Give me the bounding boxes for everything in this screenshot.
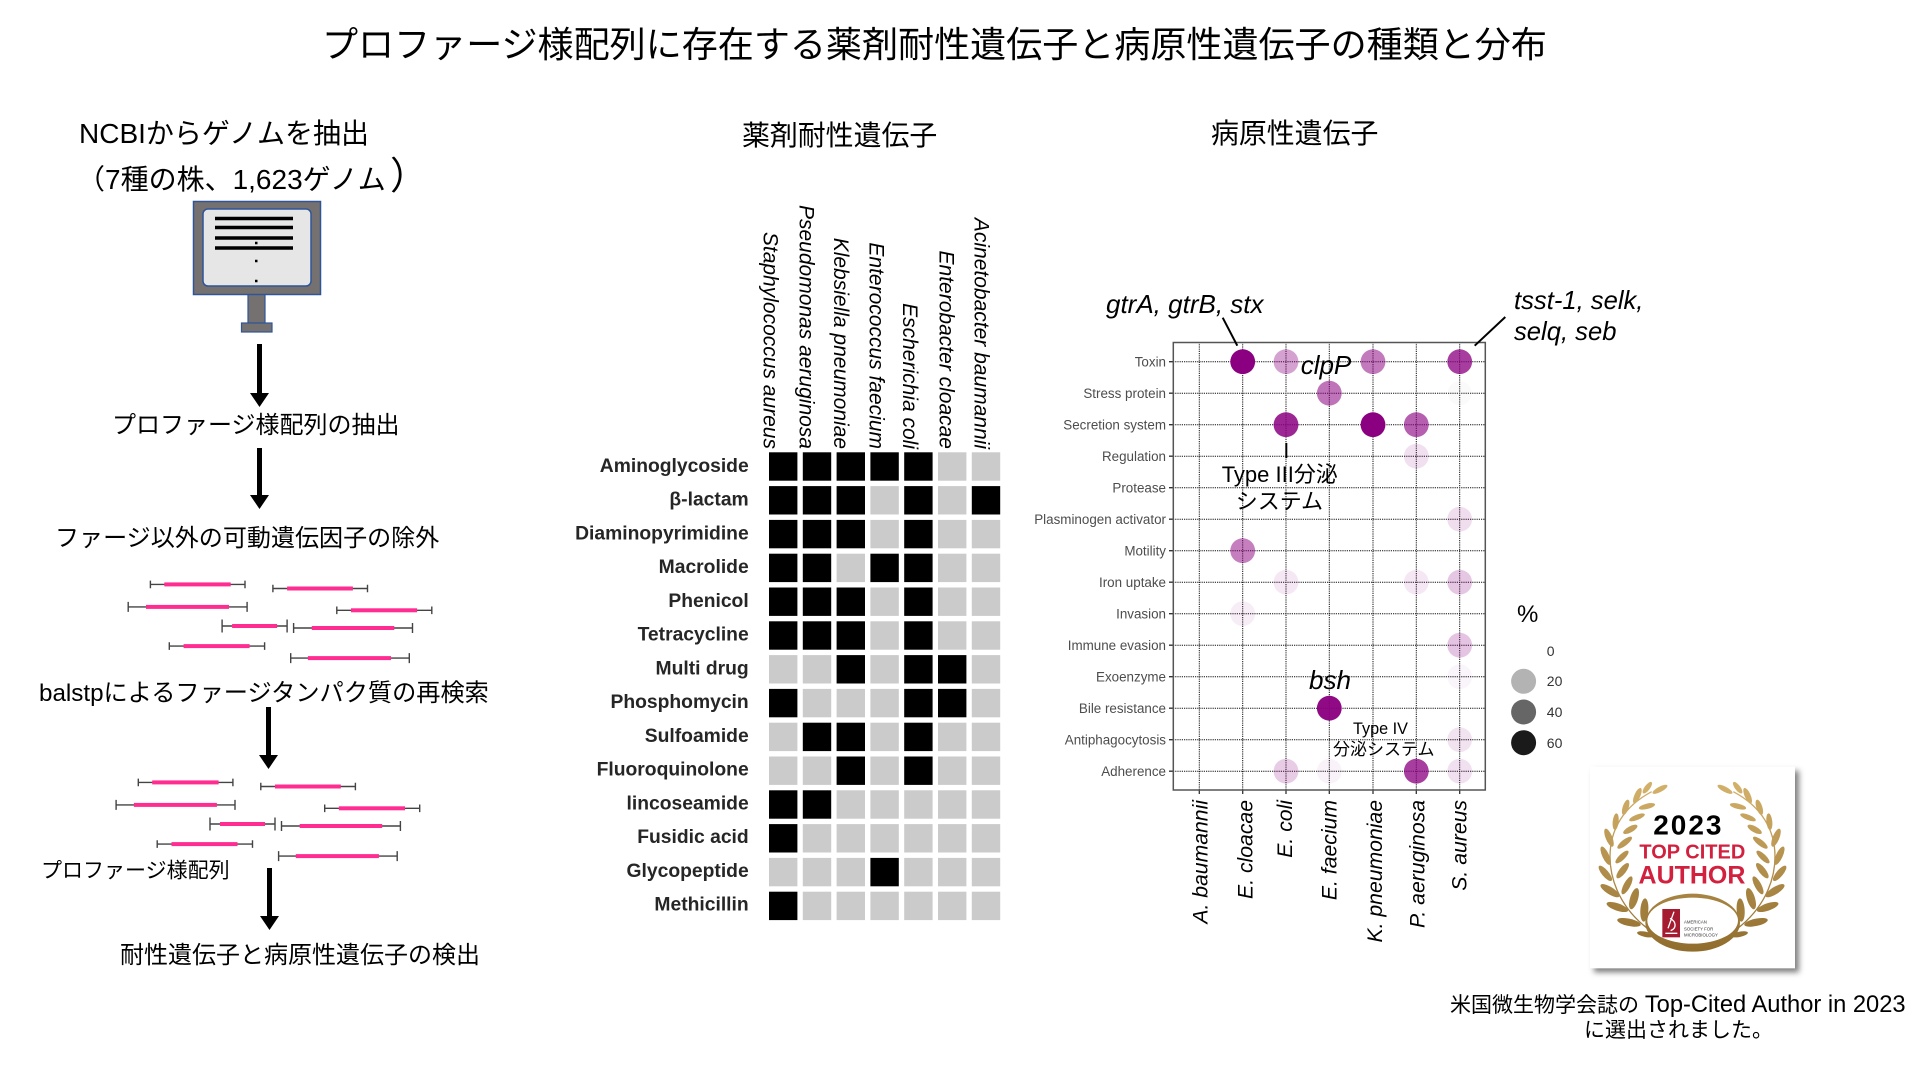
annotation: type III secretion: Type III分泌 (1222, 462, 1338, 487)
annotation: type III secretion (1222, 443, 1338, 514)
y axis labels: Regulation (1102, 449, 1166, 464)
row labels: drug classes: Macrolide (659, 557, 749, 578)
column labels: species: Pseudomonas aeruginosa (794, 205, 818, 449)
step text: NCBI genome extraction: NCBIからゲノムを抽出 (79, 118, 369, 149)
panel: virulence gene bubble chart (1034, 118, 1643, 943)
y axis labels: Exoenzyme (1096, 670, 1166, 684)
step text: gene detection: 耐性遺伝子と病原性遺伝子の検出 (120, 942, 480, 969)
annotation: type III secretion: システム (1236, 489, 1323, 514)
y axis labels: Stress protein (1083, 386, 1166, 401)
badge: 2023 top cited author: MICROBIOLOGY (1684, 933, 1718, 938)
y axis labels: Secretion system (1063, 418, 1166, 432)
annotation: gtrA gtrB stx: gtrA, gtrB, stx (1106, 289, 1264, 319)
badge: 2023 top cited author: AUTHOR (1639, 861, 1745, 889)
legend: 40 (1547, 704, 1563, 720)
arrow 1 (250, 344, 269, 407)
row labels: drug classes: Multi drug (656, 658, 749, 679)
heading: resistance genes: 薬剤耐性遺伝子 (742, 120, 937, 151)
legend: 60 (1547, 735, 1563, 751)
row labels: drug classes (575, 456, 749, 916)
x axis labels: K. pneumoniae (1364, 800, 1387, 943)
x axis labels: A. baumannii (1190, 799, 1212, 926)
annotation: type IV secretion: 分泌システム (1333, 740, 1434, 759)
chart frame (1173, 342, 1485, 790)
row labels: drug classes: Phenicol (668, 591, 749, 612)
annotation: gtrA gtrB stx (1106, 289, 1264, 346)
column labels: species: Acinetobacter baumannii (970, 216, 992, 450)
column labels: species: Escherichia coli (898, 303, 921, 450)
panel: resistance gene heatmap (575, 120, 1000, 920)
badge: 2023 top cited author: 2023 (1653, 809, 1723, 840)
icon: computer monitor (194, 202, 320, 332)
legend: 20 (1547, 673, 1563, 689)
annotation: tsst-1 selk selq seb (1475, 287, 1643, 346)
y axis labels: Antiphagocytosis (1065, 732, 1166, 748)
row labels: drug classes: Tetracycline (638, 625, 749, 646)
badge: 2023 top cited author: SOCIETY FOR (1684, 926, 1713, 931)
column labels: species (758, 205, 992, 450)
step text: remove mobile elements: ファージ以外の可動遺伝因子の除外 (55, 525, 439, 552)
y axis labels: Bile resistance (1079, 701, 1166, 716)
row labels: drug classes: Sulfoamide (645, 726, 749, 747)
heading: virulence genes: 病原性遺伝子 (1211, 118, 1378, 149)
y axis labels: Invasion (1116, 606, 1166, 622)
x axis labels: E. faecium (1318, 800, 1342, 900)
y axis labels: Motility (1124, 544, 1166, 558)
row labels: drug classes: lincoseamide (627, 793, 749, 814)
x axis labels: P. aeruginosa (1406, 800, 1430, 928)
arrow 2 (250, 448, 269, 509)
step text: NCBI genome extraction (77, 118, 428, 198)
x axis labels: S. aureus (1448, 800, 1472, 891)
y axis labels: Toxin (1135, 354, 1166, 370)
label: prophage-like sequences: プロファージ様配列 (41, 860, 230, 882)
heatmap grid (769, 452, 1000, 920)
x axis labels (1190, 799, 1472, 943)
diagram: prophage sequences (116, 779, 420, 861)
badge: 2023 top cited author: TOP CITED (1639, 841, 1745, 863)
row labels: drug classes: Aminoglycoside (600, 456, 749, 477)
row labels: drug classes: Diaminopyrimidine (575, 523, 749, 544)
caption: award note: 米国微生物学会誌の Top-Cited Author in 2023 (1450, 992, 1906, 1018)
x axis labels: E. coli (1274, 799, 1297, 858)
step text: prophage extraction: プロファージ様配列の抽出 (112, 412, 400, 439)
row labels: drug classes: Fluoroquinolone (597, 760, 749, 780)
y axis labels: Immune evasion (1068, 638, 1166, 653)
column labels: species: Enterobacter cloacae (934, 251, 958, 449)
legend: 0 (1547, 643, 1555, 659)
arrow 3 (259, 707, 278, 769)
row labels: drug classes: Phosphomycin (610, 692, 749, 713)
annotation: type IV secretion (1333, 720, 1434, 759)
column labels: species: Staphylococcus aureus (758, 232, 782, 449)
column labels: species: Enterococcus faecium (864, 242, 888, 449)
step text: NCBI genome extraction: ） (390, 156, 428, 198)
column labels: species: Klebsiella pneumoniae (829, 238, 852, 449)
diagram: candidate sequences (128, 581, 432, 663)
annotation: tsst-1 selk selq seb: selq, seb (1514, 318, 1616, 346)
caption: award note: に選出されました。 (1584, 1019, 1773, 1042)
row labels: drug classes: Fusidic acid (637, 827, 749, 848)
y axis labels: Iron uptake (1099, 575, 1166, 590)
y axis labels: Protease (1112, 480, 1166, 496)
y axis labels: Plasminogen activator (1034, 512, 1167, 527)
badge: 2023 top cited author: AMERICAN (1684, 919, 1707, 924)
annotation: clpP: clpP (1301, 350, 1352, 380)
legend (1511, 601, 1563, 755)
y axis labels (1034, 354, 1167, 779)
annotation: type IV secretion: Type IV (1353, 720, 1408, 738)
caption: award note (1450, 992, 1906, 1042)
badge: 2023 top cited author (1590, 767, 1795, 968)
bubbles (1230, 349, 1472, 784)
row labels: drug classes: β-lactam (669, 490, 749, 511)
row labels: drug classes: Glycopeptide (627, 861, 749, 882)
row labels: drug classes: Methicillin (654, 894, 749, 916)
step text: blastp re-search: balstpによるファージタンパク質の再検索 (39, 680, 489, 707)
x axis labels: E. cloacae (1234, 800, 1258, 899)
legend: % (1517, 601, 1538, 628)
title: プロファージ様配列に存在する薬剤耐性遺伝子と病原性遺伝子の種類と分布 (322, 24, 1547, 65)
y axis labels: Adherence (1101, 764, 1166, 779)
panel: workflow (39, 118, 489, 969)
step text: NCBI genome extraction: （7種の株、1,623ゲノム (77, 164, 386, 195)
arrow 4 (260, 868, 279, 930)
annotation: bsh: bsh (1309, 665, 1351, 695)
annotation: tsst-1 selk selq seb: tsst-1, selk, (1514, 287, 1643, 315)
